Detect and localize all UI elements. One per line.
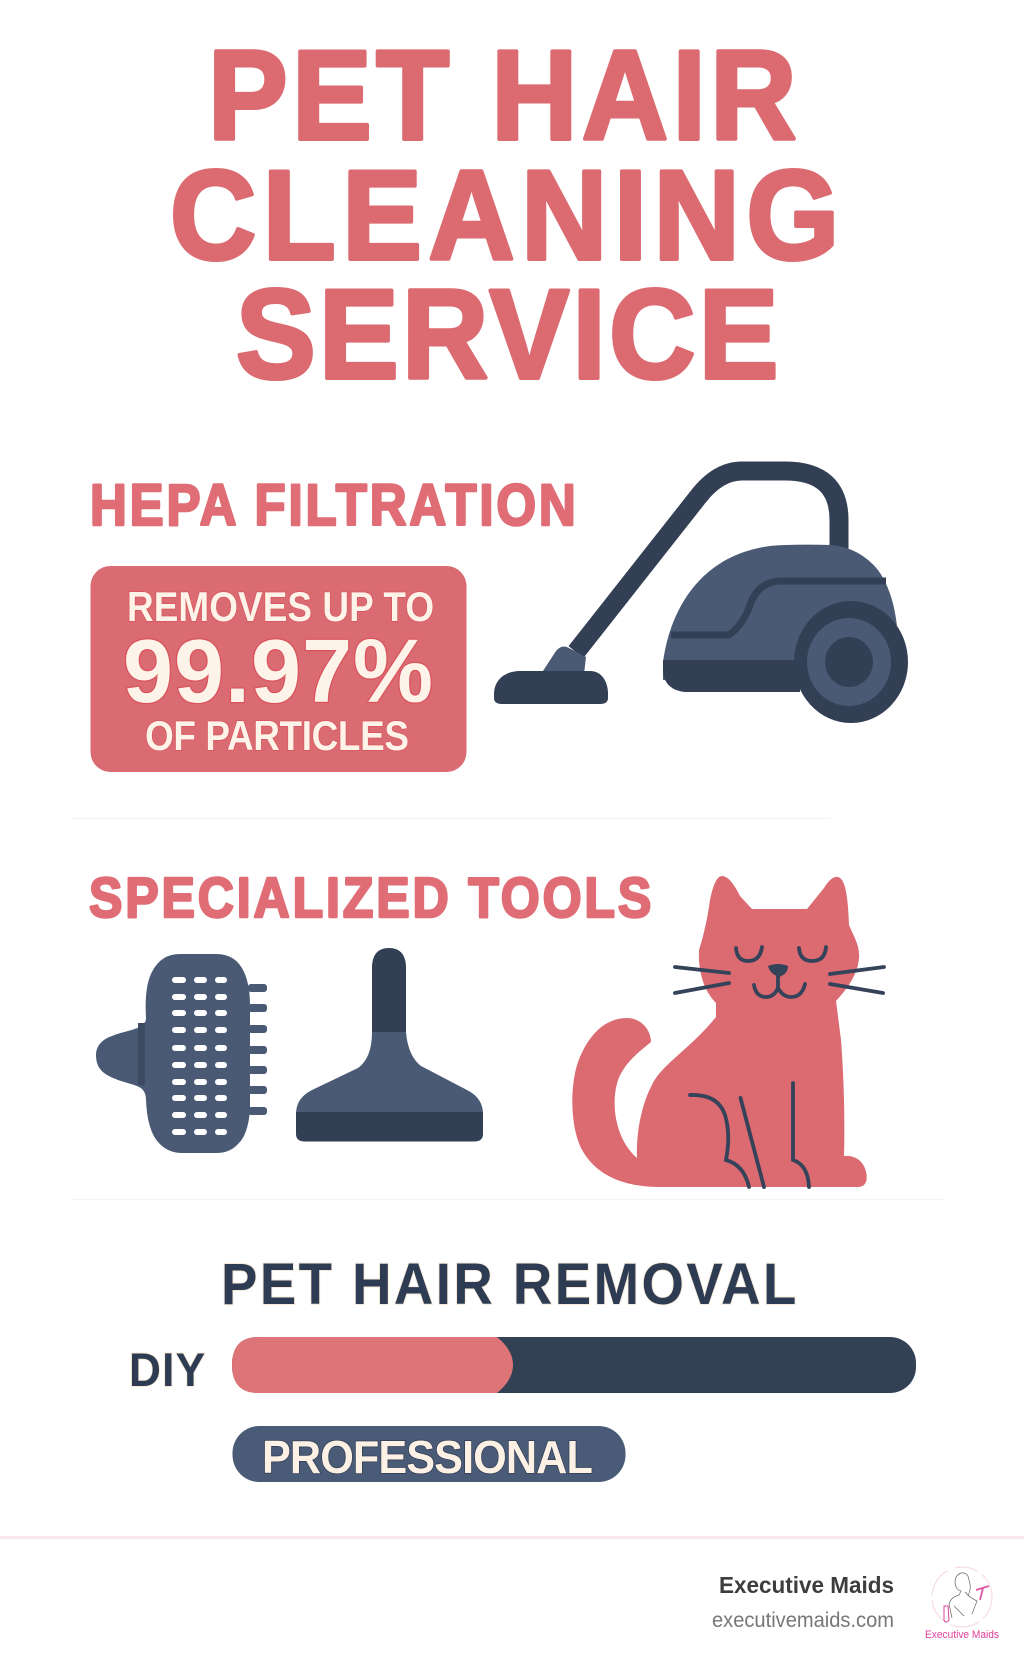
title: PET HAIR — [208, 25, 796, 167]
logo — [925, 1567, 999, 1641]
whiskers — [675, 967, 884, 993]
footer rule — [0, 1536, 1024, 1539]
heading: pet hair removal: PET HAIR REMOVAL — [221, 1251, 796, 1316]
divider — [70, 1199, 945, 1200]
panel: pet hair removal comparison — [129, 1251, 916, 1483]
title — [170, 25, 839, 406]
callout: removes up to 99.97% of particles: OF PARTICLES — [145, 713, 409, 760]
logo wordmark: Executive Maids — [925, 1629, 999, 1641]
panel: specialized tools — [89, 866, 884, 1187]
icon: vacuum cleaner — [494, 471, 908, 723]
bar: DIY — [232, 1337, 916, 1393]
eyes — [736, 947, 826, 961]
heading: HEPA filtration: HEPA FILTRATION — [90, 473, 576, 538]
footer: brand — [712, 1567, 999, 1641]
mouth — [754, 975, 805, 997]
icon: grooming comb — [96, 954, 267, 1153]
bar: professional: PROFESSIONAL — [262, 1433, 593, 1483]
panel: HEPA filtration — [90, 471, 908, 772]
website: executivemaids.com — [712, 1609, 894, 1632]
icon: vacuum nozzle — [296, 948, 483, 1142]
icon: sleeping cat — [572, 876, 884, 1187]
brand name: Executive Maids — [719, 1572, 894, 1598]
nose — [768, 964, 788, 977]
label: DIY: DIY — [129, 1344, 205, 1396]
callout: removes up to 99.97% of particles — [90, 566, 466, 772]
callout: removes up to 99.97% of particles: REMOVES UP TO — [127, 584, 434, 631]
heading: specialized tools: SPECIALIZED TOOLS — [89, 866, 651, 930]
title: SERVICE — [236, 264, 778, 406]
legs — [690, 1083, 809, 1187]
title: CLEANING — [170, 145, 839, 287]
callout: removes up to 99.97% of particles: 99.97% — [123, 622, 433, 722]
divider — [70, 818, 830, 819]
